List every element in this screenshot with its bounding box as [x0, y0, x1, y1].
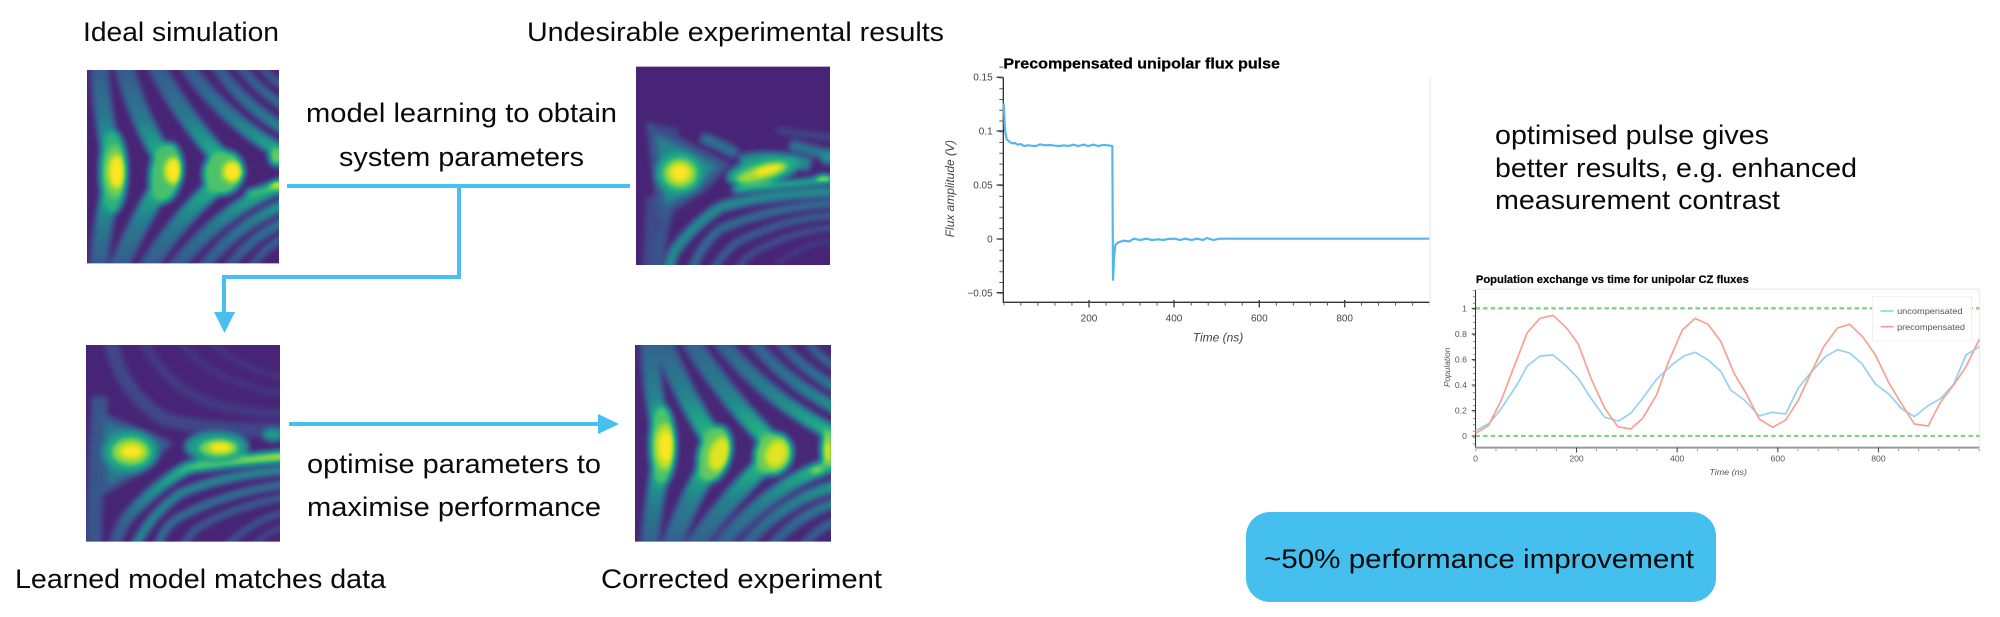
caption: learned model matches data: Learned model matches data	[15, 564, 387, 594]
chart: population exchange vs time: 0.8	[1455, 329, 1467, 339]
chart: precompensated unipolar flux pulse: Time (ns)	[1193, 330, 1243, 344]
heading: undesirable experimental results: Undesirable experimental results	[527, 17, 944, 47]
heatmap: learned model	[86, 345, 280, 542]
chart: population exchange vs time: 0.6	[1455, 355, 1467, 365]
text: optimised pulse benefit: measurement contrast	[1495, 185, 1781, 215]
chart: population exchange vs time: 1	[1462, 303, 1467, 313]
chart title: Population exchange vs time for unipolar CZ fluxes	[1476, 274, 1749, 286]
chart: precompensated unipolar flux pulse: 400	[1166, 313, 1183, 324]
text: model learning	[306, 98, 617, 172]
heatmap: ideal simulation	[87, 70, 279, 264]
arrowhead: down	[214, 312, 235, 333]
chart: precompensated unipolar flux pulse: −0.05	[967, 288, 993, 299]
chart: population exchange vs time: 0	[1473, 454, 1478, 464]
heatmap: corrected experiment	[635, 345, 831, 542]
text: optimised pulse benefit: optimised pulse gives	[1495, 120, 1769, 150]
chart: precompensated unipolar flux pulse: 0.05	[973, 181, 993, 192]
heading: ideal simulation: Ideal simulation	[83, 17, 279, 47]
chart: population exchange vs time: 800	[1871, 454, 1886, 464]
callout: performance improvement	[1246, 512, 1716, 602]
legend	[1873, 297, 1972, 341]
chart: precompensated unipolar flux pulse: Flux amplitude (V)	[943, 140, 957, 237]
legend: precompensated	[1897, 322, 1965, 332]
chart: precompensated unipolar flux pulse	[943, 55, 1431, 344]
text: optimised pulse benefit	[1495, 120, 1857, 215]
text: optimised pulse benefit: better results, e.g. enhanced	[1495, 153, 1857, 183]
chart: population exchange vs time: 200	[1569, 454, 1584, 464]
arrow: optimise parameters	[289, 414, 619, 434]
chart: precompensated unipolar flux pulse: 600	[1251, 313, 1268, 324]
chart: population exchange vs time: Time (ns)	[1709, 467, 1747, 477]
chart: population exchange vs time: 0	[1462, 431, 1467, 441]
text: optimise parameters	[307, 449, 601, 522]
heatmap: undesirable experimental results	[636, 66, 830, 265]
chart: population exchange vs time	[1442, 274, 1979, 477]
chart: population exchange vs time: Population	[1442, 347, 1452, 387]
text: model learning: system parameters	[339, 142, 584, 172]
text: optimise parameters: optimise parameters to	[307, 449, 601, 479]
chart: population exchange vs time: 400	[1670, 454, 1685, 464]
chart: precompensated unipolar flux pulse: 200	[1081, 313, 1098, 324]
chart: precompensated unipolar flux pulse: 800	[1336, 313, 1353, 324]
legend: uncompensated	[1897, 306, 1963, 316]
chart: population exchange vs time: 0.4	[1455, 380, 1467, 390]
chart: population exchange vs time: 600	[1771, 454, 1785, 464]
caption: corrected experiment: Corrected experiment	[601, 564, 883, 594]
text: optimise parameters: maximise performance	[307, 492, 601, 522]
chart: precompensated unipolar flux pulse: 0	[987, 234, 993, 245]
callout: performance improvement: ~50% performance improvement	[1264, 544, 1695, 574]
chart: precompensated unipolar flux pulse: 0.15	[973, 73, 993, 84]
chart: population exchange vs time: 0.2	[1455, 406, 1467, 416]
chart: precompensated unipolar flux pulse: 0.1	[979, 127, 993, 138]
connector: model learning line with arrow	[214, 186, 630, 333]
text: model learning: model learning to obtain	[306, 98, 617, 128]
chart title: Precompensated unipolar flux pulse	[1003, 55, 1280, 72]
